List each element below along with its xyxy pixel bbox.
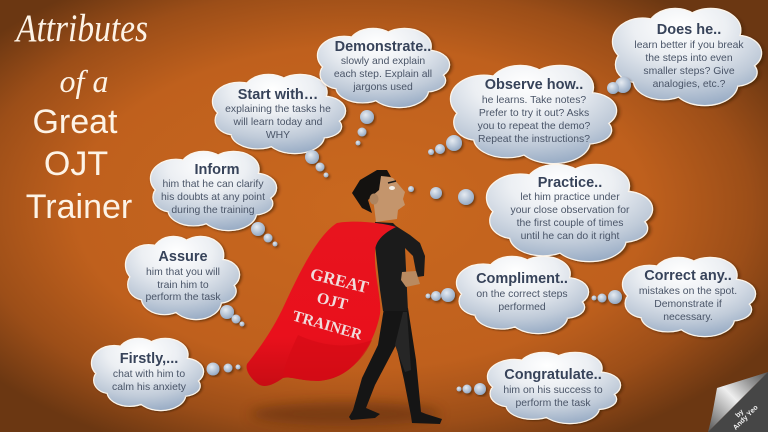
cloud: Congratulate: perform the task [515,398,591,409]
cape fold shade [283,335,372,381]
cloud: Assure: Assure [158,249,208,265]
jacket and arm [375,222,425,311]
title: Great [32,103,118,141]
cape [247,222,396,386]
character: trainer with cape [247,170,442,426]
corner page curl with credit [708,372,768,432]
title [13,7,148,226]
cloud: Demonstrate: Demonstrate.. [335,39,431,55]
cloud: Observe how [428,66,616,163]
cloud: Demonstrate: slowly and explain [341,56,425,67]
cloud: Congratulate: Congratulate.. [504,367,602,383]
cloud: Compliment: Compliment.. [476,271,568,287]
cloud: Compliment [426,257,588,333]
cloud: Correct any: necessary. [663,312,713,323]
cloud: Observe how: Repeat the instructions? [478,134,590,145]
hair [352,170,391,213]
cloud: Assure: train him to [157,280,209,291]
cloud: Inform: Inform [194,162,240,178]
cloud: Compliment: performed [498,302,546,313]
cloud: Firstly: calm his anxiety [112,382,187,393]
cloud: Practice [408,165,652,261]
cloud: Firstly: chat with him to [113,369,185,380]
cape label: OJT [315,290,350,314]
cape label: GREAT [308,264,371,297]
cloud: Correct any [592,258,755,336]
cloud: Demonstrate: each step. Explain all [334,69,432,80]
title: Trainer [26,188,132,226]
cloud: Inform: his doubts at any point [161,192,265,203]
cloud: Firstly [92,339,240,410]
cloud: Inform: during the training [171,205,255,216]
cloud: Practice: let him practice under [520,192,620,203]
cloud: Assure: perform the task [145,292,221,303]
cloud: Compliment: on the correct steps [476,289,568,300]
corner page curl with credit: by [735,409,745,419]
cloud: Demonstrate: jargons used [352,82,413,93]
neck and face [372,175,405,222]
cloud: Practice: until he can do it right [521,231,619,242]
cloud: Start with: explaining the tasks he [225,104,331,115]
cloud: Congratulate: him on his success to [503,385,603,396]
cloud: Does he: the steps into even [645,53,733,64]
cloud: Inform [151,152,278,246]
cape label [291,264,371,344]
cloud: Start with: Start with… [238,87,318,103]
cloud: Demonstrate [318,29,449,146]
cloud: Practice: your close observation for [511,205,630,216]
title: of a [60,63,108,99]
cloud: Observe how: Prefer to try it out? Asks [479,108,589,119]
cape label: TRAINER [291,308,365,344]
cloud: Does he: learn better if you break [634,40,744,51]
title: Attributes [13,7,148,50]
cloud: Observe how: you to repeat the demo? [478,121,591,132]
ear and eye [370,181,396,204]
title: OJT [44,145,108,183]
cloud: Does he: Does he.. [657,22,721,38]
cloud: Does he: smaller steps? Give [643,66,735,77]
cloud: Start with: WHY [266,130,290,141]
cloud: Start with: will learn today and [233,117,323,128]
corner page curl with credit: Andy Yeo [732,404,760,432]
cloud: Firstly: Firstly,... [120,351,178,367]
cloud: Correct any: mistakes on the spot. [639,286,737,297]
hand [401,271,420,287]
cloud: Does he [607,9,761,105]
cloud: Assure [126,237,244,326]
legs and shoes [349,308,442,424]
cloud: Practice: Practice.. [538,175,602,191]
cloud: Observe how: he learns. Take notes? [482,95,586,106]
cloud: Congratulate [456,353,620,423]
cloud: Does he: analogies, etc.? [653,79,726,90]
cloud: Start with [213,75,345,178]
cloud: Practice: the first couple of times [517,218,623,229]
cloud: Correct any: Correct any.. [644,268,732,284]
cloud: Correct any: Demonstrate if [654,299,722,310]
cloud: Observe how: Observe how.. [485,77,583,93]
cloud: Assure: him that you will [146,267,220,278]
cloud: Inform: him that he can clarify [162,179,264,190]
